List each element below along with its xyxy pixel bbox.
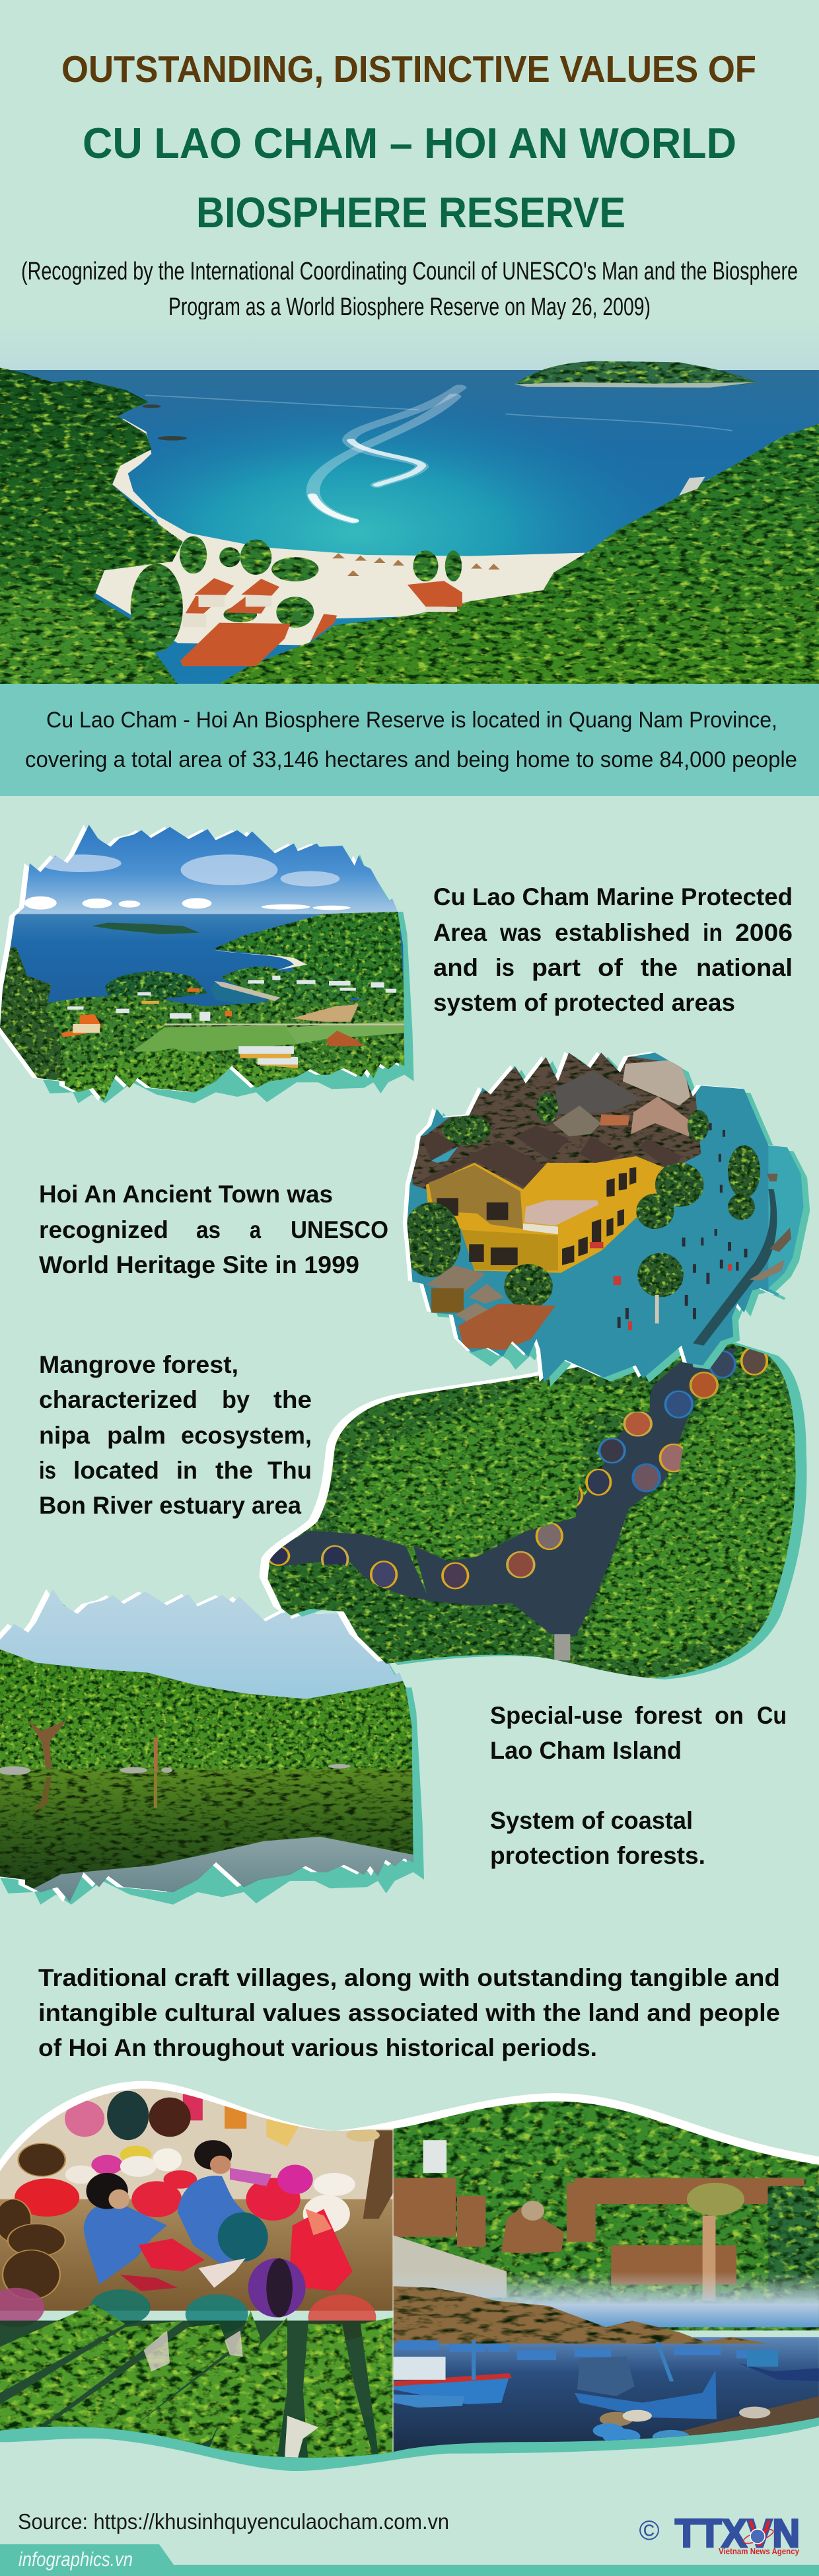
beach trees [131,536,462,652]
resort roofs [180,578,462,666]
text: marine protected area: is [495,954,515,981]
source line: Source: https://khusinhquyenculaocham.com.vn [18,2509,449,2534]
text: mangrove forest: characterized [39,1386,197,1413]
footer tab with site name: infographics.vn [18,2548,133,2571]
text: marine protected area: 2006 [735,919,793,946]
floor lanterns [0,2258,376,2340]
island on horizon [92,923,199,934]
text: mangrove forest: in [176,1457,197,1484]
clouds [24,897,351,910]
orange roofs [61,988,232,1037]
text: traditional craft villages: of Hoi An throughout various historical periods. [38,2034,597,2061]
bamboo frames [0,2143,65,2299]
text: mangrove forest: ecosystem, [181,1422,312,1449]
text: mangrove forest: by [222,1386,250,1413]
text: special-use and coastal forests: System of coastal [490,1807,693,1834]
text: Hoi An Ancient Town: World Heritage Site in 1999 [39,1251,359,1278]
text: mangrove forest: the [215,1457,253,1484]
crowd [618,1123,747,1328]
text: marine protected area: and [433,954,478,981]
text: marine protected area: the [641,954,678,981]
text: mangrove forest: Thu [267,1457,312,1484]
panel: mangrove forest photo with coracles [260,1339,819,1685]
harbor [210,982,267,1004]
text: marine protected area: was [499,919,542,946]
text: mangrove forest: located [73,1457,159,1484]
coracles [267,1347,767,1588]
artisans in blue [84,2140,268,2291]
text: Hoi An Ancient Town [39,1181,388,1278]
panel: craft villages and harbor photo collage [0,2081,819,2471]
left photo: lantern makers and vegetable rows [0,2081,393,2462]
text: Hoi An Ancient Town: Hoi An Ancient Town was [39,1181,333,1208]
text: traditional craft villages: Traditional craft villages, along with outstanding tangible and [38,1964,780,1991]
text: Hoi An Ancient Town: recognized [39,1216,168,1243]
globe emblem [742,2526,775,2546]
text: Hoi An Ancient Town: a [250,1216,261,1243]
trees and huts [402,1092,760,1308]
rocks [142,404,187,441]
village houses [67,976,396,1065]
old town roofs [412,1053,701,1189]
forested headlands [105,971,207,1000]
text: marine protected area: national [696,954,793,981]
distant boats [397,2340,767,2360]
shore and basins [627,2396,819,2448]
text: special-use and coastal forests: Special-use [490,1702,623,1729]
info band: covering a total area of 33,146 hectares and being home to some 84,000 people [25,747,797,772]
right hill [213,912,404,1000]
text: mangrove forest: Bon River estuary area [39,1492,301,1519]
title line 2: CU LAO CHAM – HOI AN WORLD [83,119,736,167]
text: mangrove forest [39,1351,312,1519]
panel: Hoi An Ancient Town photo [396,1031,819,1387]
text: traditional craft villages [38,1964,780,2061]
text: special-use and coastal forests: forest [635,1702,702,1729]
copyright mark: © [639,2515,660,2546]
text: marine protected area: established [555,919,690,946]
text: special-use and coastal forests [490,1702,787,1869]
hanging lanterns [65,2091,191,2140]
river [267,1348,738,1637]
left forested hill [0,368,183,684]
info band: Cu Lao Cham - Hoi An Biosphere Reserve is located in Quang Nam Province, [46,708,777,733]
text: mangrove forest: nipa [39,1422,90,1449]
text: marine protected area [433,883,793,1016]
text: marine protected area: part [532,954,581,981]
text: mangrove forest: Mangrove forest, [39,1351,238,1378]
TTXVN logo: TTXVN [675,2511,800,2556]
mountains [393,2286,767,2343]
TTXVN logo: Vietnam News Agency [719,2547,799,2556]
beach [94,418,585,645]
text: special-use and coastal forests: on [715,1702,744,1729]
miniature monuments [393,2178,804,2301]
text: special-use and coastal forests: protection forests. [490,1842,705,1869]
text: mangrove forest: the [273,1386,312,1413]
lowlands [0,991,404,1101]
panel: lake photo, special-use forest [0,1579,445,1909]
fields [132,1025,297,1052]
boats on river [769,1228,791,1252]
title line 1: OUTSTANDING, DISTINCTIVE VALUES OF [61,48,756,91]
text: special-use and coastal forests: Cu [757,1702,787,1729]
palm overhangs [285,1374,799,1663]
river on right [768,1145,803,1296]
footer tab with site name [0,2544,819,2576]
vegetable rows [0,2320,393,2462]
right forested hill [219,424,819,684]
panel: Cu Lao Cham island photo [0,813,423,1110]
distant island [515,361,758,388]
harbor water [393,2337,819,2455]
text: mangrove forest: is [39,1457,56,1484]
text: marine protected area: system of protected areas [433,989,735,1016]
title block [21,48,798,321]
yellow walls [426,1156,674,1273]
right photo: garden miniatures and fishing harbor [393,2094,819,2455]
text: marine protected area: in [703,919,723,946]
piled paper lanterns [15,2146,355,2291]
text: marine protected area: Area [433,919,487,946]
fishing boats [393,2350,819,2419]
text: Hoi An Ancient Town: UNESCO [291,1216,388,1243]
text: marine protected area: Cu Lao Cham Marine Protected [433,883,793,910]
photo: bay with beach and island [0,319,819,684]
text: mangrove forest: palm [107,1422,166,1449]
text: marine protected area: of [598,954,623,981]
text: Hoi An Ancient Town: as [196,1216,221,1243]
text: traditional craft villages: intangible cultural values associated with the land and people [38,1999,780,2026]
subtitle: Program as a World Biosphere Reserve on May 26, 2009) [168,293,651,321]
foreground foliage [67,1049,423,1110]
info band [0,684,819,796]
boat wakes [146,388,731,521]
subtitle [21,258,798,321]
title line 3: BIOSPHERE RESERVE [196,188,625,237]
beach umbrellas [332,553,500,576]
text: special-use and coastal forests: Lao Cham Island [490,1737,682,1764]
